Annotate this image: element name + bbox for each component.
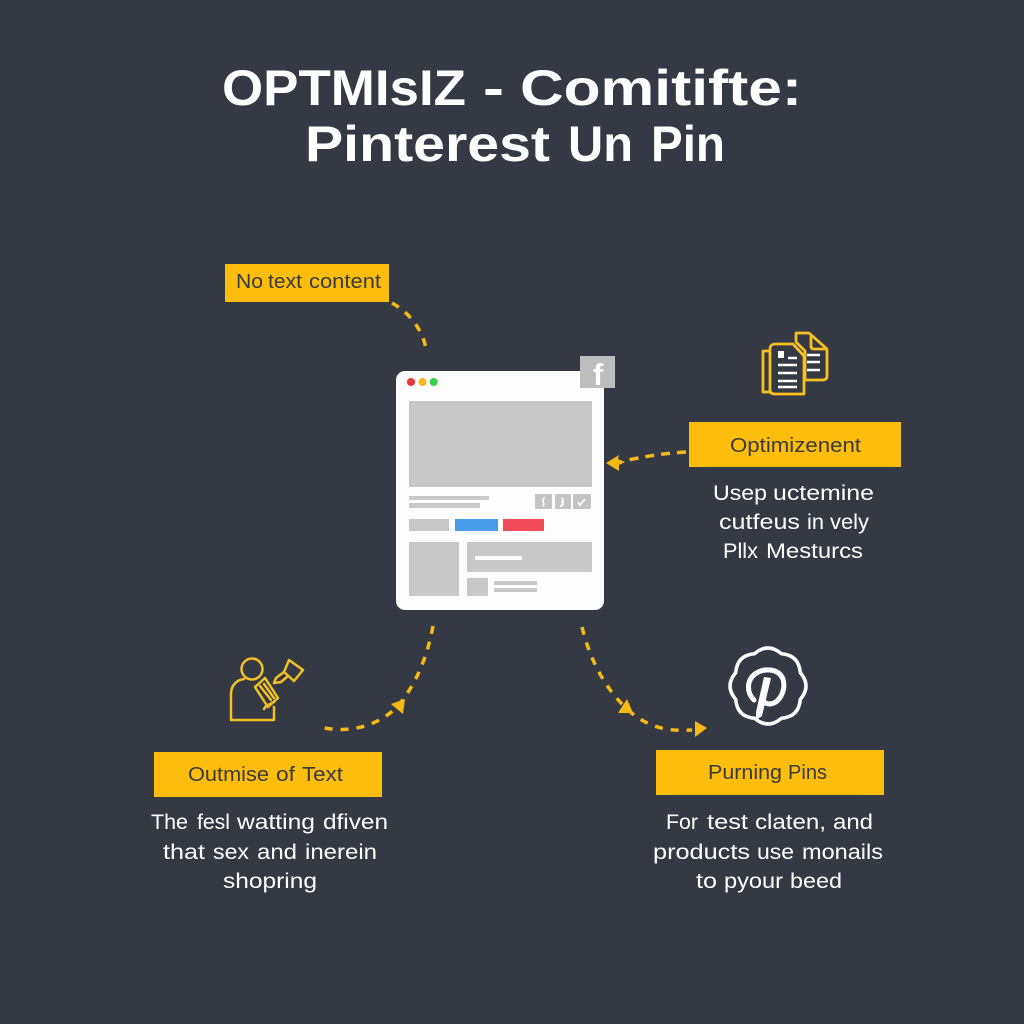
label: optimizenent: Optimizenent [730,435,861,457]
text: outmise description: sex [213,841,250,864]
label: outmise of text: Outmise [188,764,269,786]
title [222,60,802,172]
arrow: label to card [392,303,426,351]
text: outmise description: The [151,811,188,834]
text: outmise description: dfiven [323,811,388,834]
text: outmise description: shopring [223,870,317,893]
icon: facebook badge: f [593,357,604,392]
label: no text content: No [236,271,263,293]
text: purning pins description: to [696,870,717,893]
label: outmise of text: Text [302,764,343,786]
text: outmise description: and [257,841,297,864]
label: no text content [225,264,389,302]
panel: browser mockup [396,371,604,610]
arrow: card to purning pins [582,627,707,737]
text: purning pins description: test [707,811,748,834]
label: purning pins [656,750,884,795]
text: outmise description: inerein [305,841,377,864]
text: outmise description: that [163,841,205,864]
text: optimizenent description: Mesturcs [766,540,863,563]
icon: pinterest badge [730,648,806,724]
text: purning pins description: use [757,841,794,864]
text: outmise description: watting [236,811,315,834]
arrow: card to outmise [320,626,433,729]
text: purning pins description: monails [802,841,883,864]
title: OPTMIsIZ [222,60,466,116]
title: Pinterest [305,116,550,172]
text: outmise description: fesl [197,811,230,834]
label: optimizenent [689,422,901,467]
text: purning pins description: claten, [755,811,826,834]
title: Un [568,116,633,172]
text: optimizenent description: vely [830,511,870,534]
text: optimizenent description: uctemine [773,482,874,505]
text: optimizenent description: in [807,511,824,534]
title: - [483,60,504,116]
arrow: optimizenent to card [606,452,686,471]
text: purning pins description: products [653,841,750,864]
label: purning pins: Pins [788,762,827,784]
text: optimizenent description [713,482,874,563]
text: purning pins description: For [666,811,698,834]
text: purning pins description: beed [790,870,842,893]
text: optimizenent description: Usep [713,482,767,505]
text: optimizenent description: cutfeus [719,511,800,534]
label: purning pins: Purning [708,762,782,784]
text: outmise description [151,811,388,893]
text: purning pins description [653,811,883,893]
icon: documents [763,333,827,394]
icon: facebook badge [580,356,615,392]
text: purning pins description: pyour [724,870,783,893]
label: no text content: text [268,271,302,293]
text: purning pins description: and [833,811,873,834]
text: optimizenent description: Pllx [723,540,759,563]
label: no text content: content [309,271,381,293]
label: outmise of text: of [276,764,295,786]
icon: person with tool [231,658,303,720]
title: Pin [651,116,725,172]
label: outmise of text [154,752,382,797]
title: Comitifte: [520,60,802,116]
